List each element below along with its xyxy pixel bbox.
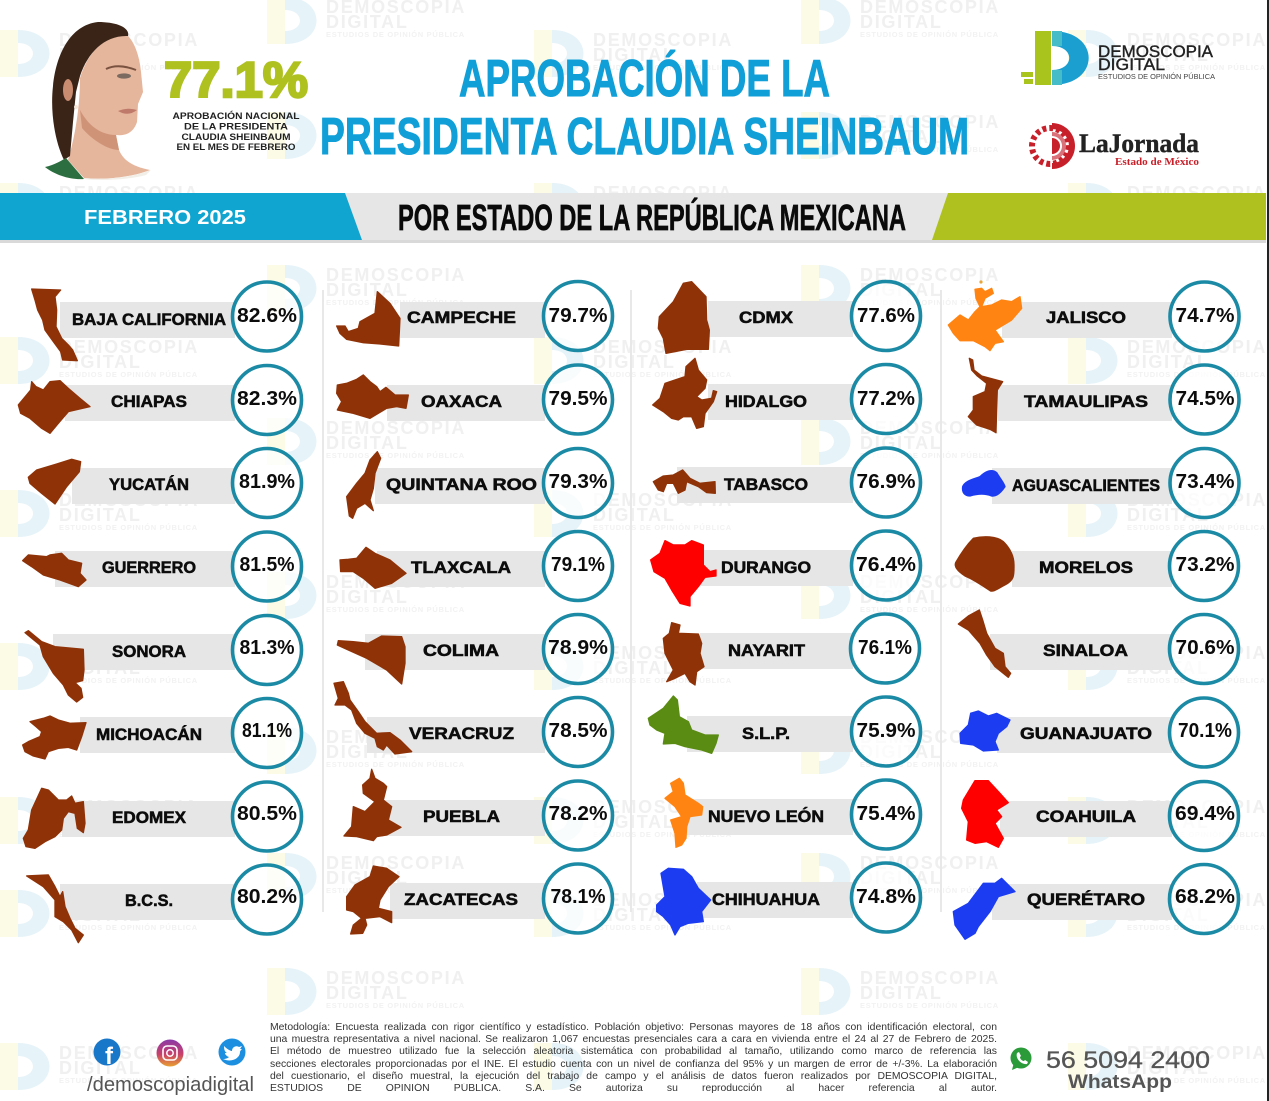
state row: Aguascalientes: AGUASCALIENTES (1012, 477, 1160, 495)
state row: Edomex: 80.5% (237, 803, 297, 825)
state row: Campeche (337, 282, 612, 350)
background watermarks: DIGITAL (1127, 658, 1210, 678)
state row: Jalisco: JALISCO (1046, 309, 1126, 327)
state row: Tamaulipas: TAMAULIPAS (1024, 393, 1148, 411)
background watermarks: DIGITAL (59, 505, 142, 525)
background watermarks: DIGITAL (326, 12, 409, 32)
state row: Veracruz: 78.5% (548, 720, 608, 742)
state row: Durango (651, 531, 920, 606)
state row: Nuevo León: NUEVO LEÓN (708, 807, 824, 826)
background watermarks: DIGITAL (1127, 905, 1210, 925)
state row: Coahuila: COAHUILA (1036, 808, 1136, 826)
state row: Campeche: 79.7% (548, 305, 608, 327)
state row: Chiapas: 82.3% (237, 388, 297, 410)
background watermarks: DEMOSCOPIA (1127, 30, 1267, 50)
background watermarks: DIGITAL (326, 433, 409, 453)
background watermarks: ESTUDIOS DE OPINIÓN PÚBLICA (860, 451, 999, 460)
methodology text block: ESTUDIOS DE OPINIÓN PÚBLICA. S.A. Se autoriza su reproducción al hacer referencia al autor. (270, 1083, 997, 1094)
methodology text block: El método de muestreo utilizado fue la selección aleatoria sistemática con probabilidad al tamaño, utilizando como marco de referencia las (270, 1046, 997, 1057)
ribbon header (0, 193, 1266, 243)
state row: Nayarit: NAYARIT (728, 642, 805, 660)
background watermarks: ESTUDIOS DE OPINIÓN PÚBLICA (860, 760, 999, 769)
state row: Querétaro: QUERÉTARO (1027, 890, 1145, 909)
state row: Chihuahua: 74.8% (856, 886, 916, 908)
background watermarks: ESTUDIOS DE OPINIÓN PÚBLICA (326, 451, 465, 460)
state row: CDMX (658, 282, 920, 353)
state row: Hidalgo: 77.2% (857, 388, 915, 410)
state row: Colima: COLIMA (423, 642, 499, 660)
background watermarks: ESTUDIOS DE OPINIÓN PÚBLICA (326, 886, 465, 895)
background watermarks: DIGITAL (1127, 812, 1210, 832)
state row: CDMX: CDMX (739, 309, 793, 327)
title: APROBACIÓN DE LA (459, 50, 830, 108)
state row: San Luis Potosí: 75.9% (856, 720, 916, 742)
background watermarks: DEMOSCOPIA (1127, 337, 1267, 357)
logo: Demoscopia Digital: DEMOSCOPIA (1098, 43, 1213, 61)
background watermarks: DEMOSCOPIA (59, 797, 199, 817)
background watermarks: ESTUDIOS DE OPINIÓN PÚBLICA (593, 676, 732, 685)
background watermarks: DEMOSCOPIA (593, 890, 733, 910)
methodology text block: una muestra representativa a nivel nacional. Se realizaron 1,067 encuestas presenciales cara a cara en vivienda entre el 24 al 27 de Febrero de 2025. (270, 1034, 997, 1045)
background watermarks: DEMOSCOPIA (59, 890, 199, 910)
state row: Guanajuato: 70.1% (1178, 720, 1232, 742)
state row: Baja California: 82.6% (237, 305, 297, 327)
state row: Guerrero (23, 532, 302, 601)
background watermarks: DEMOSCOPIA (860, 265, 1000, 285)
state row: Tlaxcala: TLAXCALA (411, 559, 511, 577)
WhatsApp label: WhatsApp (1068, 1072, 1172, 1093)
national approval caption: DE LA PRESIDENTA (184, 122, 288, 132)
background watermarks: DIGITAL (1127, 45, 1210, 65)
logo: La Jornada Estado de México (1032, 123, 1199, 169)
background watermarks: ESTUDIOS DE OPINIÓN PÚBLICA (860, 298, 999, 307)
state row: Coahuila: 69.4% (1175, 803, 1235, 825)
state row: Sinaloa: 70.6% (1176, 637, 1235, 659)
background watermarks: DIGITAL (59, 658, 142, 678)
state row: Jalisco: 74.7% (1176, 305, 1235, 327)
background watermarks: DIGITAL (59, 45, 142, 65)
state row: Guanajuato (960, 698, 1238, 767)
background watermarks: DIGITAL (860, 742, 943, 762)
state row: Tamaulipas (968, 358, 1239, 434)
national approval figure: 77.1% (164, 52, 308, 108)
state row: Campeche: CAMPECHE (407, 309, 516, 327)
background watermarks: ESTUDIOS DE OPINIÓN PÚBLICA (59, 63, 198, 72)
background watermarks: DEMOSCOPIA (1127, 890, 1267, 910)
logo: Demoscopia Digital: ESTUDIOS DE OPINIÓN PÚBLICA (1098, 72, 1215, 81)
background watermarks: DEMOSCOPIA (593, 797, 733, 817)
background watermarks: DEMOSCOPIA (593, 643, 733, 663)
ribbon header: POR ESTADO DE LA REPÚBLICA MEXICANA (398, 196, 906, 238)
national approval caption: CLAUDIA SHEINBAUM (182, 132, 291, 143)
state row: Tlaxcala (340, 532, 612, 600)
background watermarks: DIGITAL (593, 658, 676, 678)
social handle: /demoscopiadigital (87, 1074, 254, 1096)
state row: Michoacán (23, 698, 302, 768)
background watermarks: DIGITAL (593, 905, 676, 925)
background watermarks: ESTUDIOS DE OPINIÓN PÚBLICA (326, 298, 465, 307)
background watermarks: ESTUDIOS DE OPINIÓN PÚBLICA (593, 830, 732, 839)
state row: Veracruz: VERACRUZ (409, 725, 514, 743)
background watermarks: ESTUDIOS DE OPINIÓN PÚBLICA (59, 523, 198, 532)
state row: Querétaro: 68.2% (1175, 886, 1235, 908)
background watermarks: DIGITAL (860, 433, 943, 453)
background watermarks: DEMOSCOPIA (1127, 1043, 1267, 1063)
icon: Twitter (218, 1038, 246, 1066)
background watermarks: DEMOSCOPIA (59, 1043, 199, 1063)
title (320, 50, 969, 166)
state row: Tabasco: TABASCO (724, 476, 808, 494)
state row: Nuevo León: 75.4% (856, 803, 916, 825)
background watermarks: DEMOSCOPIA (860, 418, 1000, 438)
state row: Quintana Roo (347, 448, 612, 518)
background watermarks: DIGITAL (860, 587, 943, 607)
state row: Chiapas: CHIAPAS (111, 393, 187, 411)
background watermarks: ESTUDIOS DE OPINIÓN PÚBLICA (1127, 370, 1266, 379)
icon: Facebook (94, 1038, 120, 1070)
icon: Facebook: f (105, 1043, 114, 1070)
state row: Zacatecas: ZACATECAS (404, 891, 518, 909)
methodology text block (270, 1022, 997, 1094)
state row: Coahuila (962, 781, 1238, 850)
state row: Puebla: PUEBLA (423, 808, 500, 826)
state row: Chihuahua (657, 863, 920, 935)
state row: Sonora (25, 616, 302, 702)
background watermarks: DEMOSCOPIA (860, 853, 1000, 873)
national approval caption: EN EL MES DE FEBRERO (176, 142, 296, 153)
state row: Sinaloa (958, 610, 1238, 684)
background watermarks: DIGITAL (860, 983, 943, 1003)
background watermarks: DEMOSCOPIA (326, 727, 466, 747)
state row: Guerrero: GUERRERO (102, 559, 196, 577)
logo: La Jornada Estado de México: LaJornada (1079, 129, 1199, 158)
state row: Colima (337, 614, 612, 684)
state row: Tamaulipas: 74.5% (1176, 388, 1235, 410)
national approval caption (172, 110, 300, 153)
title: PRESIDENTA CLAUDIA SHEINBAUM (320, 108, 969, 166)
background watermarks: DEMOSCOPIA (860, 112, 1000, 132)
background watermarks: ESTUDIOS DE OPINIÓN PÚBLICA (59, 676, 198, 685)
background watermarks: DIGITAL (326, 983, 409, 1003)
background watermarks: ESTUDIOS DE OPINIÓN PÚBLICA (593, 63, 732, 72)
state row: Sonora: 81.3% (240, 637, 295, 659)
background watermarks: DIGITAL (1127, 352, 1210, 372)
background watermarks: ESTUDIOS DE OPINIÓN PÚBLICA (1127, 523, 1266, 532)
background watermarks: DEMOSCOPIA (593, 337, 733, 357)
state row: Zacatecas: 78.1% (550, 886, 606, 908)
state row: Chihuahua: CHIHUAHUA (712, 891, 820, 909)
state row: Querétaro (953, 864, 1238, 939)
background watermarks: DIGITAL (326, 742, 409, 762)
state row: Guerrero: 81.5% (240, 554, 295, 576)
state row: San Luis Potosí: S.L.P. (742, 725, 790, 743)
state row: B.C.S.: B.C.S. (125, 892, 173, 910)
state row: Tabasco: 76.9% (856, 471, 916, 493)
background watermarks: DIGITAL (593, 812, 676, 832)
background watermarks: DEMOSCOPIA (860, 727, 1000, 747)
background watermarks: ESTUDIOS DE OPINIÓN PÚBLICA (1127, 1076, 1266, 1085)
state row: Morelos: MORELOS (1039, 559, 1133, 577)
background watermarks: DIGITAL (860, 127, 943, 147)
background watermarks: DEMOSCOPIA (59, 30, 199, 50)
state row: Quintana Roo: 79.3% (548, 471, 608, 493)
background watermarks: ESTUDIOS DE OPINIÓN PÚBLICA (593, 523, 732, 532)
state row: Yucatán (28, 448, 301, 518)
background watermarks: ESTUDIOS DE OPINIÓN PÚBLICA (1127, 63, 1266, 72)
background watermarks: ESTUDIOS DE OPINIÓN PÚBLICA (326, 760, 465, 769)
background watermarks: ESTUDIOS DE OPINIÓN PÚBLICA (59, 830, 198, 839)
background watermarks: DEMOSCOPIA (860, 968, 1000, 988)
state row: Nayarit (663, 614, 920, 685)
background watermarks: ESTUDIOS DE OPINIÓN PÚBLICA (326, 1001, 465, 1010)
background watermarks: DIGITAL (326, 280, 409, 300)
background watermarks: ESTUDIOS DE OPINIÓN PÚBLICA (59, 1076, 198, 1085)
background watermarks: ESTUDIOS DE OPINIÓN PÚBLICA (1127, 830, 1266, 839)
background watermarks: DIGITAL (59, 905, 142, 925)
state row: Colima: 78.9% (548, 637, 608, 659)
methodology text block: secciones electorales proporcionadas por el INE. El estudio cuenta con un nivel de confianza del 95% y un margen de error de +/-3%. La elaboración (270, 1059, 997, 1070)
background watermarks: DIGITAL (593, 352, 676, 372)
background watermarks: ESTUDIOS DE OPINIÓN PÚBLICA (860, 1001, 999, 1010)
background watermarks: DIGITAL (59, 812, 142, 832)
background watermarks: DIGITAL (1127, 1058, 1210, 1078)
background watermarks: DEMOSCOPIA (1127, 797, 1267, 817)
state row: Hidalgo (653, 358, 920, 434)
background watermarks: ESTUDIOS DE OPINIÓN PÚBLICA (1127, 676, 1266, 685)
state row: B.C.S. (27, 865, 301, 943)
background watermarks: ESTUDIOS DE OPINIÓN PÚBLICA (593, 923, 732, 932)
state row: Chiapas (18, 366, 301, 434)
background watermarks: DEMOSCOPIA (1127, 643, 1267, 663)
background watermarks: DIGITAL (593, 505, 676, 525)
state row: Oaxaca: OAXACA (421, 393, 502, 411)
state row: Guanajuato: GUANAJUATO (1020, 725, 1152, 743)
state row: Nuevo León (665, 778, 920, 849)
background watermarks: DEMOSCOPIA (59, 337, 199, 357)
state row: Yucatán: 81.9% (239, 471, 295, 493)
state row: Sonora: SONORA (112, 643, 186, 661)
state row: Morelos (955, 532, 1238, 600)
background watermarks: ESTUDIOS DE OPINIÓN PÚBLICA (326, 30, 465, 39)
state row: Jalisco (948, 280, 1239, 351)
state row: Tabasco (653, 448, 920, 517)
background watermarks: ESTUDIOS DE OPINIÓN PÚBLICA (593, 370, 732, 379)
ribbon header: FEBRERO 2025 (84, 206, 246, 229)
background watermarks: DIGITAL (860, 12, 943, 32)
state row: Hidalgo: HIDALGO (725, 393, 807, 411)
state row: Morelos: 73.2% (1176, 554, 1235, 576)
background watermarks: ESTUDIOS DE OPINIÓN PÚBLICA (326, 605, 465, 614)
background watermarks: DEMOSCOPIA (59, 490, 199, 510)
state row: Aguascalientes (962, 448, 1239, 518)
background watermarks: DEMOSCOPIA (59, 183, 199, 203)
background watermarks: DEMOSCOPIA (593, 490, 733, 510)
background watermarks: DEMOSCOPIA (326, 853, 466, 873)
background watermarks: DEMOSCOPIA (593, 30, 733, 50)
state row: Nayarit: 76.1% (858, 637, 912, 659)
state row: Zacatecas (347, 864, 612, 934)
state row: Tlaxcala: 79.1% (551, 554, 605, 576)
state row: Yucatán: YUCATÁN (109, 475, 189, 494)
methodology text block: Metodología: Encuesta realizada con rigor científico y estadístico. Población objetivo: Personas mayores de 18 años con identificación electoral, con (270, 1022, 997, 1033)
logo: Demoscopia Digital: DIGITAL (1098, 56, 1165, 74)
background watermarks: DEMOSCOPIA (860, 572, 1000, 592)
state row: Baja California: BAJA CALIFORNIA (72, 311, 226, 329)
background watermarks: ESTUDIOS DE OPINIÓN PÚBLICA (59, 370, 198, 379)
icon: Instagram (156, 1040, 184, 1066)
state row: Edomex: EDOMEX (112, 809, 186, 827)
background watermarks: DIGITAL (593, 45, 676, 65)
state row: Veracruz (334, 682, 612, 766)
background watermarks: ESTUDIOS DE OPINIÓN PÚBLICA (860, 605, 999, 614)
methodology text block: del cuestionario, el diseño muestral, la ejecución del trabajo de campo y el análisis de datos fueron realizados por DEMOSCOPIA DIGITAL, (270, 1071, 997, 1082)
portrait of Claudia Sheinbaum (45, 22, 151, 180)
background watermarks: ESTUDIOS DE OPINIÓN PÚBLICA (860, 145, 999, 154)
background watermarks: DIGITAL (860, 868, 943, 888)
background watermarks: DEMOSCOPIA (326, 968, 466, 988)
national approval caption: APROBACIÓN NACIONAL (172, 110, 300, 122)
state row: Quintana Roo: QUINTANA ROO (386, 476, 537, 494)
background watermarks: ESTUDIOS DE OPINIÓN PÚBLICA (860, 886, 999, 895)
background watermarks: ESTUDIOS DE OPINIÓN PÚBLICA (860, 30, 999, 39)
state row: Edomex (23, 782, 302, 851)
state row: CDMX: 77.6% (857, 305, 915, 327)
state row: Sinaloa: SINALOA (1043, 642, 1128, 660)
background watermarks: ESTUDIOS DE OPINIÓN PÚBLICA (1127, 923, 1266, 932)
background watermarks: DIGITAL (860, 280, 943, 300)
state row: Michoacán: MICHOACÁN (96, 725, 202, 744)
icon: WhatsApp (1010, 1048, 1032, 1070)
background watermarks: DIGITAL (326, 587, 409, 607)
state row: Oaxaca: 79.5% (548, 388, 608, 410)
background watermarks: DEMOSCOPIA (59, 643, 199, 663)
background watermarks: DIGITAL (59, 1058, 142, 1078)
state row: Puebla (344, 769, 612, 850)
background watermarks: DEMOSCOPIA (326, 265, 466, 285)
background watermarks: DEMOSCOPIA (326, 418, 466, 438)
logo: La Jornada Estado de México: Estado de México (1115, 156, 1199, 168)
logo: Demoscopia Digital (1021, 31, 1215, 85)
background watermarks: DEMOSCOPIA (1127, 490, 1267, 510)
background watermarks: DEMOSCOPIA (593, 183, 733, 203)
background watermarks: DIGITAL (326, 868, 409, 888)
background watermarks: ESTUDIOS DE OPINIÓN PÚBLICA (59, 923, 198, 932)
background watermarks: DIGITAL (1127, 505, 1210, 525)
background watermarks: DEMOSCOPIA (326, 572, 466, 592)
state row: Oaxaca (337, 365, 612, 434)
state row: Durango: DURANGO (721, 559, 811, 577)
state row: B.C.S.: 80.2% (237, 886, 297, 908)
background watermarks: DIGITAL (59, 352, 142, 372)
phone number: 56 5094 2400 (1046, 1047, 1210, 1074)
state row: Aguascalientes: 73.4% (1176, 471, 1235, 493)
state row: Puebla: 78.2% (548, 803, 608, 825)
state row: Michoacán: 81.1% (242, 720, 292, 742)
state row: San Luis Potosí (648, 696, 920, 766)
state row: Baja California (32, 282, 301, 361)
background watermarks: DEMOSCOPIA (1127, 183, 1267, 203)
state row: Durango: 76.4% (856, 554, 916, 576)
